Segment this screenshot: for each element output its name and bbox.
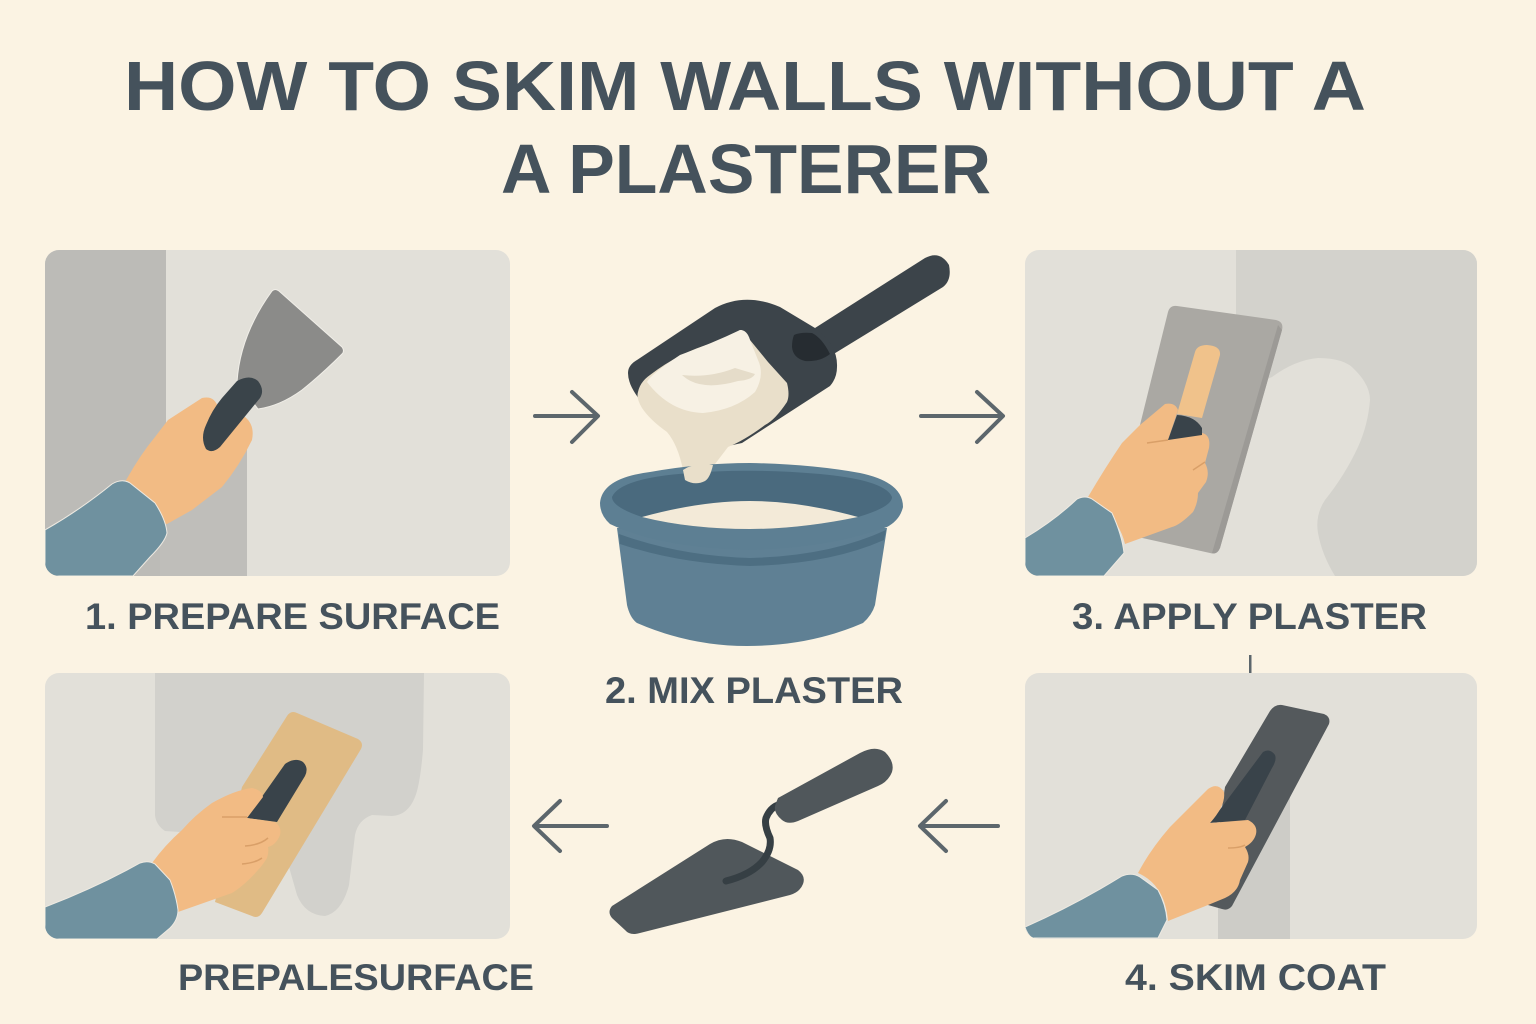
panel: final step smoothing: [45, 673, 510, 939]
label: final step: PREPALESURFACE: [178, 957, 534, 998]
icon: scraper blade: [237, 290, 344, 409]
icon: steel trowel: [1138, 306, 1282, 553]
title: [124, 47, 1366, 208]
label: step 3: 3. APPLY PLASTER: [1072, 596, 1427, 637]
icon: hand and sleeve with scraper: [45, 378, 262, 576]
icon: trowel handle: [1177, 345, 1220, 418]
icon: hand and sleeve: [45, 788, 280, 939]
arrow: step 2 to 3: [921, 392, 1003, 442]
arrow: trowel to final step: [534, 801, 607, 851]
icon: scoop with plaster: [628, 255, 950, 483]
arrow: step 1 to 2: [535, 392, 598, 442]
panel: step 1 prepare surface: [45, 250, 510, 576]
icon: dark float: [1208, 705, 1329, 910]
icon: hand and sleeve: [1025, 786, 1256, 938]
icon: hand and sleeve: [1025, 404, 1209, 576]
title: HOW TO SKIM WALLS WITHOUT A: [124, 47, 1366, 125]
icon: wooden float: [215, 712, 362, 917]
label: step 4: 4. SKIM COAT: [1125, 957, 1386, 998]
panel: step 3 apply plaster: [1025, 250, 1477, 576]
arrow: step 4 to trowel: [920, 801, 998, 851]
label: step 1: 1. PREPARE SURFACE: [85, 596, 500, 637]
icon: bricklaying trowel: [610, 749, 893, 934]
icon: mixing bucket: [600, 463, 903, 646]
label: step 2: 2. MIX PLASTER: [605, 670, 903, 711]
title: A PLASTERER: [501, 130, 991, 208]
panel: step 4 skim coat: [1025, 673, 1477, 939]
